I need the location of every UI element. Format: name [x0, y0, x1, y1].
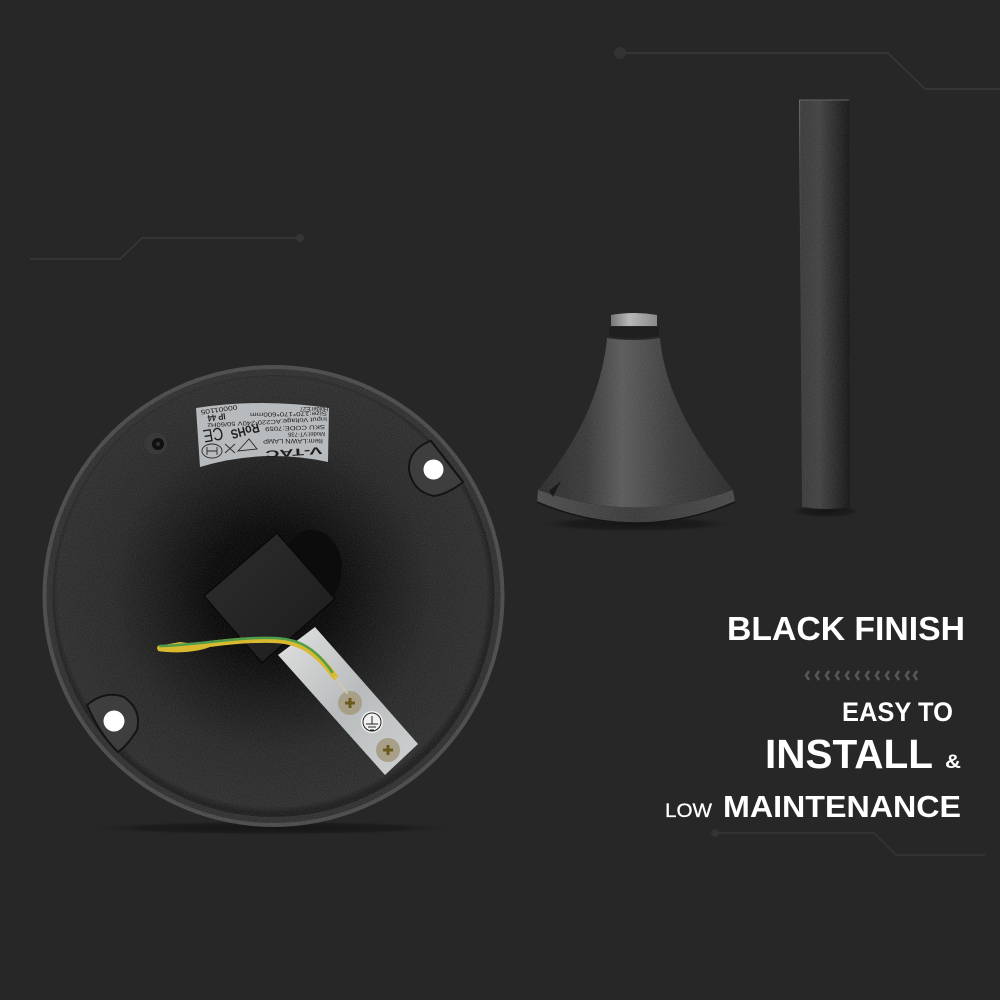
product label: SKU CODE:7059	[264, 423, 325, 431]
product: bell-shaped base	[536, 313, 736, 532]
heading: black finish: BLACK FINISH	[727, 610, 965, 647]
square junction box	[204, 533, 335, 663]
earth symbol	[361, 711, 383, 733]
product label: Item:LAWN LAMP	[263, 437, 323, 443]
mounting boss: bottom left	[87, 695, 138, 752]
product label: CE	[202, 423, 225, 446]
green and yellow earth wire	[158, 638, 347, 693]
product: lamp underside disc	[42, 365, 504, 835]
earth screw upper	[338, 691, 362, 715]
mounting boss: top right	[409, 441, 463, 496]
product label: Size:170*170*600mm	[250, 410, 327, 417]
earth screw lower	[376, 738, 400, 762]
product label	[196, 403, 329, 467]
product label: Input Voltage:AC220-240V 50/60Hz	[207, 415, 327, 427]
small screw post	[145, 432, 167, 454]
product label: Holder:E27	[299, 405, 328, 411]
text block: easy to install and low maintenance: MAINTENANCE	[723, 790, 961, 824]
text block: easy to install and low maintenance	[665, 697, 961, 824]
product label: IP 44	[207, 411, 226, 423]
text block: easy to install and low maintenance: INSTALL	[765, 731, 933, 777]
text block: easy to install and low maintenance: &	[945, 752, 961, 773]
decorative circuit line: top right	[614, 47, 1000, 89]
product label: RoHS	[229, 420, 261, 442]
chevron divider	[806, 671, 917, 680]
lamp holder socket shadow	[282, 530, 342, 606]
text block: easy to install and low maintenance: LOW	[665, 801, 712, 822]
threaded top	[611, 313, 657, 326]
product label: 00001105	[200, 403, 238, 415]
steel earth bracket	[278, 627, 418, 775]
decorative circuit line: left	[30, 234, 304, 259]
product: black pole tube	[790, 100, 862, 518]
label safety symbols	[202, 439, 257, 458]
text block: easy to install and low maintenance: EASY TO	[842, 697, 953, 727]
product label: Model:VT-736	[287, 430, 325, 437]
product label: V-TAC	[265, 444, 323, 459]
decorative circuit line: bottom right	[711, 829, 985, 855]
